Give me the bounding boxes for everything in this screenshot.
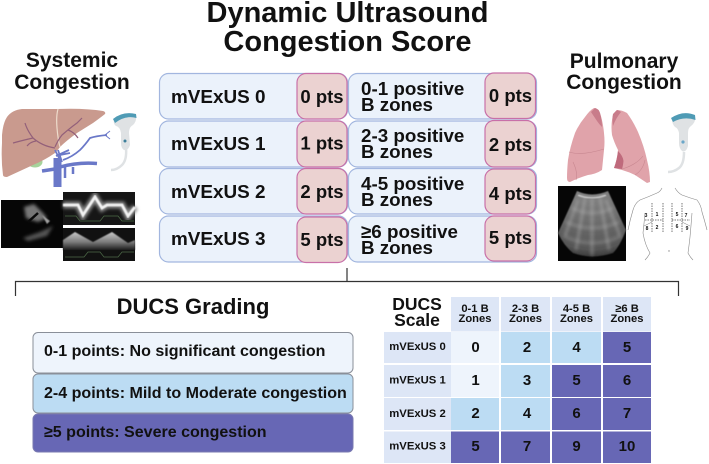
panel: systemic score rows	[160, 74, 348, 262]
table row: mVExUS 1: 1	[471, 372, 480, 389]
heading: systemic congestion: Systemic	[26, 49, 118, 72]
table row: mVExUS 2: 2	[471, 405, 480, 422]
row: mVExUS 0: 0 pts	[300, 86, 344, 107]
row: 6 or more positive B zones: ≥6 positive	[361, 221, 458, 242]
table row: mVExUS 2: 7	[623, 405, 631, 422]
heading: pulmonary congestion: Pulmonary	[570, 50, 679, 73]
table column headers: Zones	[459, 313, 491, 325]
table row: mVExUS 0	[384, 332, 651, 363]
row: mVExUS 3	[160, 216, 348, 262]
row: 2-3 positive B zones: 2 pts	[489, 134, 532, 155]
table row: mVExUS 3: 9	[572, 438, 581, 455]
table row: mVExUS 0: mVExUS 0	[389, 341, 446, 353]
row: mVExUS 1: mVExUS 1	[171, 134, 266, 155]
panel: pulmonary score rows	[348, 73, 536, 262]
row: 0-1 positive B zones: 0 pts	[489, 85, 532, 106]
table row: mVExUS 1: 3	[523, 372, 531, 389]
table column headers: Zones	[509, 313, 542, 325]
row: 0-1 positive B zones: B zones	[361, 94, 433, 115]
grade: no significant congestion	[33, 332, 353, 373]
icon: lungs	[567, 108, 650, 183]
row: mVExUS 0	[160, 74, 348, 119]
ultrasound image: lung B-lines	[558, 186, 626, 261]
diagram: chest zones: 3	[645, 213, 648, 219]
table column headers: Zones	[611, 313, 643, 325]
bracket connector	[16, 268, 678, 296]
table heading: Scale	[394, 310, 440, 330]
row: mVExUS 2	[160, 168, 348, 214]
diagram: chest zones: 9	[686, 226, 689, 232]
row: 2-3 positive B zones: B zones	[361, 141, 433, 162]
table row: mVExUS 3: mVExUS 3	[389, 440, 446, 452]
table heading: DUCS	[392, 294, 442, 314]
row: 0-1 positive B zones	[348, 73, 536, 119]
table column headers: Zones	[560, 313, 593, 325]
table row: mVExUS 3	[384, 432, 651, 463]
table column headers: 0-1 B	[461, 303, 489, 315]
row: mVExUS 1: 1 pts	[300, 132, 344, 154]
icon: ultrasound probe, systemic	[111, 113, 136, 170]
table row: mVExUS 1	[384, 365, 651, 397]
table row: mVExUS 0: 4	[572, 339, 581, 356]
row: 6 or more positive B zones	[348, 216, 536, 262]
table column headers: ≥6 B	[615, 303, 639, 315]
table row: mVExUS 0: 5	[623, 339, 631, 356]
heading: DUCS grading: DUCS Grading	[117, 294, 269, 319]
heading: pulmonary congestion: Congestion	[566, 71, 682, 94]
table row: mVExUS 2: 6	[572, 405, 581, 422]
table row: mVExUS 1: 5	[572, 372, 581, 389]
table row: mVExUS 2	[384, 398, 651, 430]
table row: mVExUS 1: mVExUS 1	[389, 374, 446, 386]
row: 4-5 positive B zones: 4-5 positive	[361, 173, 464, 194]
table row: mVExUS 0: 0	[471, 339, 480, 356]
row: mVExUS 2: mVExUS 2	[171, 182, 266, 203]
row: 4-5 positive B zones: B zones	[361, 189, 433, 210]
grade: mild to moderate congestion: 2-4 points: Mild to Moderate congestion	[44, 384, 347, 402]
row: mVExUS 3: mVExUS 3	[171, 229, 266, 250]
panel: grading legend	[33, 332, 353, 452]
row: 2-3 positive B zones	[348, 120, 536, 167]
diagram: chest zones: 2	[656, 225, 659, 231]
table row: mVExUS 1: 6	[623, 372, 631, 389]
table row: mVExUS 3: 10	[619, 438, 635, 455]
grade: no significant congestion: 0-1 points: No significant congestion	[44, 342, 325, 360]
row: 6 or more positive B zones: B zones	[361, 237, 433, 258]
grade: severe congestion: ≥5 points: Severe congestion	[44, 423, 267, 441]
table row: mVExUS 2: mVExUS 2	[389, 408, 446, 420]
heading: systemic congestion: Congestion	[14, 71, 130, 94]
diagram: chest zones: 5	[676, 212, 679, 218]
row: mVExUS 3: 5 pts	[300, 229, 344, 250]
doppler trace: upper	[63, 192, 135, 225]
table column headers	[451, 297, 651, 332]
diagram: chest zones: 7	[685, 213, 688, 219]
grade: mild to moderate congestion	[33, 374, 353, 413]
grade: severe congestion	[33, 414, 353, 452]
icon: ultrasound probe, pulmonary	[668, 113, 696, 172]
row: 0-1 positive B zones: 0-1 positive	[361, 78, 464, 99]
heading: systemic congestion	[14, 49, 130, 94]
doppler trace: lower	[63, 228, 135, 261]
table row: mVExUS 2: 4	[523, 405, 532, 422]
table row: mVExUS 3: 5	[471, 438, 480, 455]
icon: liver with veins	[2, 109, 110, 187]
row: mVExUS 2: 2 pts	[300, 181, 344, 202]
ultrasound image: liver echo	[1, 200, 63, 248]
row: 4-5 positive B zones: 4 pts	[489, 183, 532, 204]
title: Congestion Score	[223, 26, 472, 58]
title	[206, 0, 488, 58]
table: DUCS scale	[384, 294, 651, 463]
row: 6 or more positive B zones: 5 pts	[489, 227, 532, 248]
row: mVExUS 0: mVExUS 0	[171, 87, 266, 108]
table heading	[392, 294, 442, 330]
table row: mVExUS 3: 7	[523, 438, 531, 455]
heading: pulmonary congestion	[566, 50, 682, 94]
diagram: chest zones: 6	[676, 224, 679, 230]
table column headers: 2-3 B	[512, 303, 539, 315]
diagram: chest zones: 1	[656, 212, 659, 218]
diagram: chest zones	[628, 188, 707, 260]
row: mVExUS 1	[160, 121, 348, 167]
table column headers: 4-5 B	[563, 303, 590, 315]
table row: mVExUS 0: 2	[523, 339, 531, 356]
row: 2-3 positive B zones: 2-3 positive	[361, 125, 464, 146]
row: 4-5 positive B zones	[348, 168, 536, 214]
diagram: chest zones: 8	[646, 226, 649, 232]
